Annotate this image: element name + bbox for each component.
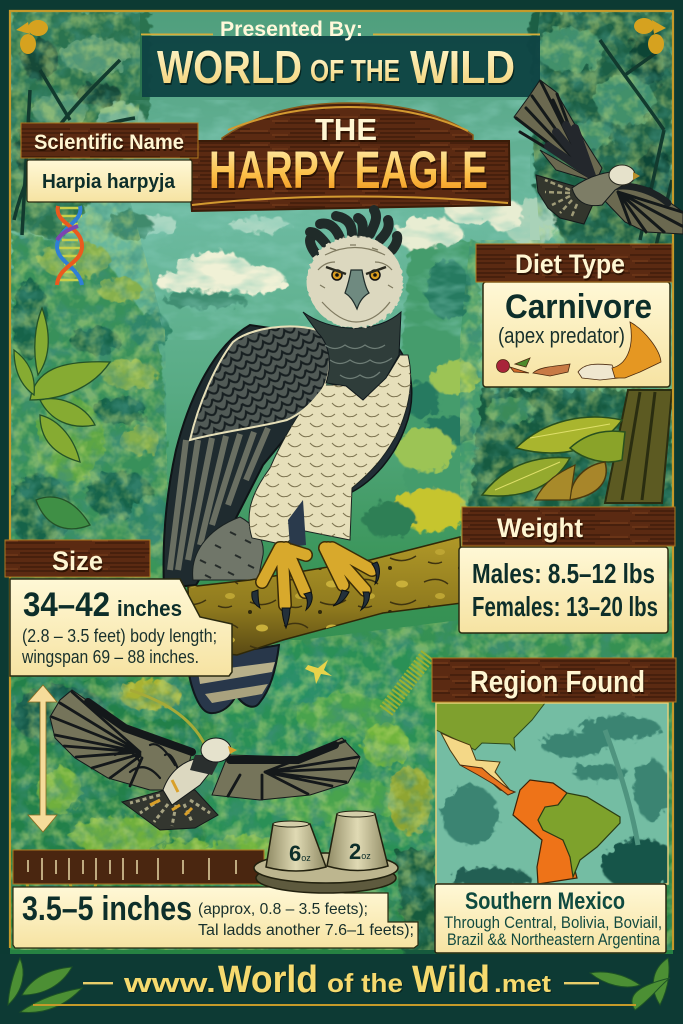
title: harpy eagle: HARPY EAGLE: [209, 141, 488, 200]
fern, lower right of centre: [385, 655, 428, 712]
primary feather lines: [170, 428, 268, 570]
left forest: [10, 235, 172, 560]
left foot: [262, 548, 306, 605]
tail: [187, 645, 279, 713]
board body: [189, 141, 510, 211]
heading: Scientific Name: [34, 131, 184, 154]
foliage, bottom left: [8, 958, 82, 1013]
beak: [345, 270, 369, 309]
body: [163, 758, 212, 805]
breast scale pattern: [249, 355, 411, 545]
map border: [436, 703, 668, 884]
plank: [21, 123, 198, 158]
icon: prey animals: [496, 322, 661, 380]
beak: [633, 172, 640, 180]
brand: world of the wild: [157, 41, 515, 93]
far wing sliver: [350, 350, 412, 492]
wing coverts: [190, 326, 330, 440]
perch branch: [188, 537, 462, 655]
upper corners: [10, 11, 150, 240]
panel: diet type: [476, 244, 672, 387]
brand: world of the wild: WORLD: [157, 41, 302, 93]
tail: [536, 175, 594, 224]
beak: [228, 746, 237, 754]
website: [123, 959, 551, 1001]
tropical leaves, left: [14, 308, 110, 529]
lower centre: [200, 645, 440, 900]
value: Carnivore: [505, 288, 652, 326]
lower left: [10, 680, 200, 900]
trunk bark lines: [622, 392, 655, 500]
corner ornament: right: [634, 18, 666, 54]
brand: world of the wild: WILD: [410, 41, 515, 93]
arch trim: [228, 107, 468, 131]
region name: Southern Mexico: [465, 888, 625, 915]
approx note: (approx, 0.8 – 3.5 feets);: [198, 901, 368, 918]
feet: [150, 780, 192, 815]
dark collar: [190, 755, 222, 775]
icon: weights on a base: 6oz: [289, 841, 311, 866]
dark mantle: [303, 312, 401, 400]
yellow flowers: [305, 660, 332, 684]
footer band: [0, 954, 683, 1024]
large tropical leaves, right: [482, 417, 625, 500]
presented by header: [141, 18, 540, 97]
card: [27, 160, 192, 202]
grey belly: [193, 517, 263, 580]
breast: [249, 355, 411, 545]
head: [307, 236, 403, 328]
website: World: [218, 959, 318, 1001]
icon: dna helix: [57, 206, 82, 285]
foliage, bottom right: [590, 958, 670, 1010]
footer rule: [33, 1004, 636, 1006]
value: 3.5–5 inches: [22, 890, 192, 928]
raised wing base: [514, 80, 602, 182]
primary feathers: [164, 325, 318, 588]
card: [459, 547, 668, 633]
value: Harpia harpyja: [42, 171, 176, 193]
card: [13, 887, 418, 948]
right wing feathers: [228, 741, 358, 799]
tree trunk, right: [605, 390, 672, 503]
plank: [476, 244, 672, 282]
ruler: [13, 850, 264, 884]
left wing base: [50, 690, 192, 790]
brand: world of the wild: OF THE: [310, 53, 400, 88]
panel: weight: [459, 507, 675, 633]
flying eagle, top right: [514, 80, 683, 234]
tail bars: [545, 180, 577, 218]
facial disc marks: [318, 245, 393, 322]
heading: Region Found: [470, 664, 645, 699]
heading: Size: [52, 546, 103, 576]
panel: size: [5, 540, 232, 676]
website: .met: [494, 971, 551, 998]
far wing feathers: [610, 186, 682, 232]
right of eagle forest: [398, 240, 480, 530]
body length: (2.8 – 3.5 feet) body length;: [22, 626, 217, 646]
left eye: [332, 270, 342, 280]
brows: [326, 267, 386, 274]
clouds: [394, 199, 524, 252]
belly speckle: [200, 532, 254, 578]
header rule, left: [141, 34, 213, 35]
bottom trim: [192, 196, 508, 205]
panel: length ruler and weights: [13, 811, 418, 948]
raised wing feathers: [516, 82, 592, 176]
unit: inches: [117, 596, 182, 621]
card: [10, 579, 232, 676]
mantle feathers: [325, 345, 392, 378]
website: Wild: [412, 959, 490, 1001]
panel: scientific name: [21, 123, 198, 202]
arrow: height scale: [28, 685, 57, 832]
title: the: THE: [315, 112, 377, 147]
claws: [252, 562, 379, 628]
wingspan: wingspan 69 – 88 inches.: [21, 647, 199, 667]
south america: brazil: [538, 793, 620, 877]
far wing base: [604, 186, 683, 234]
tail note: Tal ladds another 7.6–1 feets);: [198, 922, 414, 939]
mottled foliage texture, sky: [130, 100, 530, 340]
plank: [5, 540, 150, 577]
icon: weights on a base: 2oz: [349, 839, 371, 864]
website: of the: [327, 968, 403, 998]
crest: [310, 210, 397, 254]
plank: [462, 507, 675, 546]
map: [436, 703, 678, 891]
central america: [460, 765, 515, 795]
card: [435, 884, 666, 953]
dash, left: [83, 982, 113, 984]
head: [609, 165, 635, 185]
tail: [122, 790, 218, 830]
main harpy eagle illustration: [164, 210, 412, 713]
body: [572, 172, 635, 206]
icon: weights on a base: [254, 811, 398, 893]
mexico: [441, 733, 512, 793]
tree trunk on map: [605, 730, 638, 845]
value: 34–42: [23, 586, 110, 624]
left wing feathers: [52, 692, 192, 786]
tree branches, upper right: [600, 40, 672, 250]
lower left grasses: [22, 690, 205, 900]
corner ornament: left: [16, 20, 48, 54]
plank: [432, 658, 676, 702]
right eye: [370, 270, 380, 280]
right wing base: [212, 738, 360, 800]
note: (apex predator): [498, 323, 625, 348]
map foliage: [442, 716, 678, 891]
shadow between legs: [288, 500, 306, 547]
card: [483, 282, 670, 387]
label: presented by: Presented By:: [220, 18, 363, 41]
head: [201, 738, 231, 762]
tree branches, upper left: [14, 60, 135, 235]
tail bars: [130, 795, 210, 826]
dash, right: [564, 982, 599, 984]
flying eagle, lower left: [50, 690, 360, 830]
far right forest: [470, 390, 673, 510]
north america: [436, 703, 545, 750]
board arch: [222, 103, 473, 145]
ruler ticks: [28, 858, 236, 880]
heading: Diet Type: [515, 249, 625, 279]
website: www.: [123, 968, 216, 998]
south america: orange range: [513, 780, 577, 884]
eagle talons: [252, 548, 379, 628]
footer: [0, 954, 683, 1024]
header rule, right: [373, 34, 540, 35]
panel: region found: [432, 658, 678, 953]
main title board: [189, 103, 510, 211]
right foot: [325, 548, 372, 590]
heading: Weight: [497, 513, 583, 543]
banner: dark teal: [142, 36, 540, 97]
